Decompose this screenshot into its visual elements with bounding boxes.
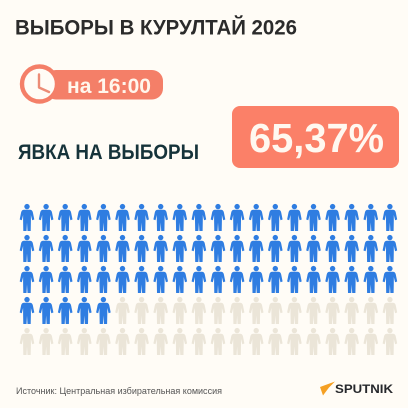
icon: Sputnik wing <box>320 382 335 396</box>
logo: Sputnik <box>320 382 393 396</box>
turnout value box <box>232 106 399 168</box>
pictogram: 100 people, 65 highlighted <box>20 204 397 355</box>
badge time text: на 16:00 <box>67 75 151 98</box>
people row 2 <box>20 235 397 262</box>
turnout label: ЯВКА НА ВЫБОРЫ <box>18 141 199 164</box>
source note: Источник: Центральная избирательная комиссия <box>16 386 222 396</box>
people row 5 <box>20 328 397 355</box>
turnout value box: 65,37% <box>249 115 384 161</box>
time badge <box>22 66 163 102</box>
logo: Sputnik: SPUTNIK <box>335 382 393 396</box>
badge pill <box>45 70 163 100</box>
people row 4 <box>20 297 397 324</box>
title: ВЫБОРЫ В КУРУЛТАЙ 2026 <box>15 16 297 40</box>
people row 3 <box>20 266 397 293</box>
people row 1 <box>20 204 397 231</box>
icon: clock <box>22 66 57 102</box>
